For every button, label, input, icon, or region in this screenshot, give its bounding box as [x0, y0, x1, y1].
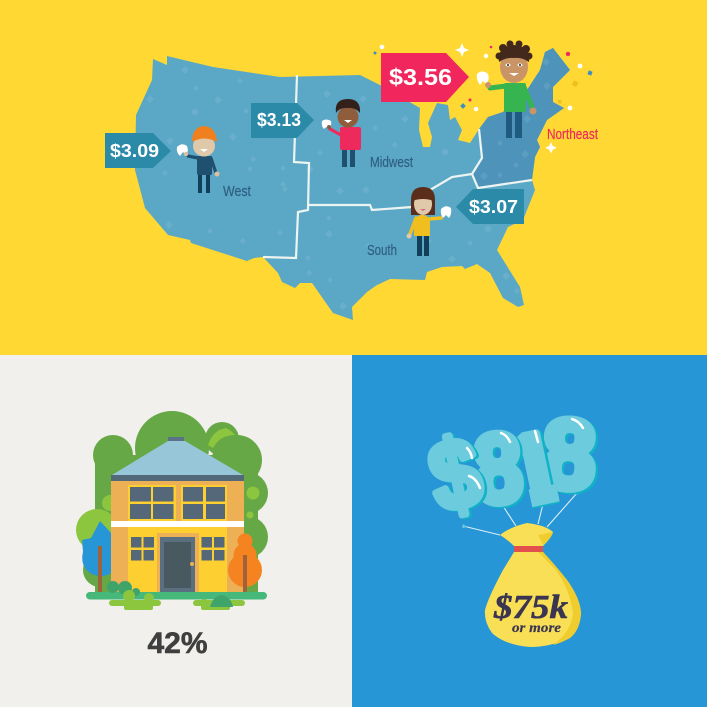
label: Northeast: Northeast	[547, 126, 599, 143]
upper windows	[128, 485, 227, 521]
left tree backdrop	[76, 509, 118, 551]
character: Northeast man	[477, 40, 536, 138]
foliage	[83, 411, 268, 592]
panel: house background	[0, 355, 352, 707]
balloon 8 right: 8	[542, 399, 601, 512]
bag text: $75k	[493, 589, 568, 626]
ground	[86, 592, 267, 600]
label: Midwest: Midwest	[370, 154, 414, 171]
blue tree trunk	[98, 546, 102, 592]
price tag: West: $3.09	[110, 141, 159, 161]
balloon 8 right: 8	[539, 398, 598, 511]
money bag	[485, 523, 581, 647]
map: northeast region	[471, 48, 570, 188]
character: South woman	[406, 187, 451, 256]
tooth	[322, 120, 331, 129]
map: land outline	[135, 48, 570, 320]
map: sparkles	[146, 58, 551, 310]
tooth	[177, 144, 188, 156]
balloon number: $818	[427, 416, 598, 520]
illustration: house with trees	[76, 411, 268, 610]
price tag: West	[105, 133, 171, 168]
price tag: South: $3.07	[469, 197, 518, 217]
balloon 1: 1	[496, 409, 572, 527]
balloon 8 left: 8	[473, 413, 528, 526]
statistic: 42%: 42%	[147, 627, 208, 660]
lower windows	[131, 537, 224, 560]
balloon 1	[517, 429, 560, 508]
confetti	[374, 43, 593, 154]
price tag: Midwest: $3.13	[257, 110, 301, 130]
balloon dollar sign: $	[420, 416, 491, 533]
orange tree	[228, 534, 262, 599]
map: region borders	[263, 75, 532, 258]
label: South: South	[367, 242, 397, 259]
character: Midwest man	[322, 99, 361, 167]
panel: balloon background	[352, 355, 707, 707]
tooth	[441, 206, 451, 218]
balloon strings	[462, 491, 578, 535]
balloon 1: 1	[499, 409, 575, 528]
price tag: Northeast: $3.56	[389, 64, 452, 90]
balloon 8 left: 8	[470, 411, 526, 525]
bushes	[107, 581, 245, 610]
character: West man	[177, 126, 220, 193]
panel: regional map background	[0, 0, 707, 355]
money bag: or more	[512, 621, 561, 636]
map: United States	[135, 48, 570, 320]
price tag: Northeast	[381, 53, 469, 102]
roof	[112, 441, 243, 475]
tooth	[477, 72, 489, 85]
price tag: Midwest	[251, 103, 314, 138]
price tag: South	[456, 189, 524, 224]
balloon highlights	[467, 419, 583, 488]
label: West: West	[223, 183, 252, 200]
balloon dollar sign: $	[422, 417, 493, 534]
blue tree crown	[82, 521, 113, 576]
door	[157, 533, 199, 592]
walls	[111, 481, 244, 521]
